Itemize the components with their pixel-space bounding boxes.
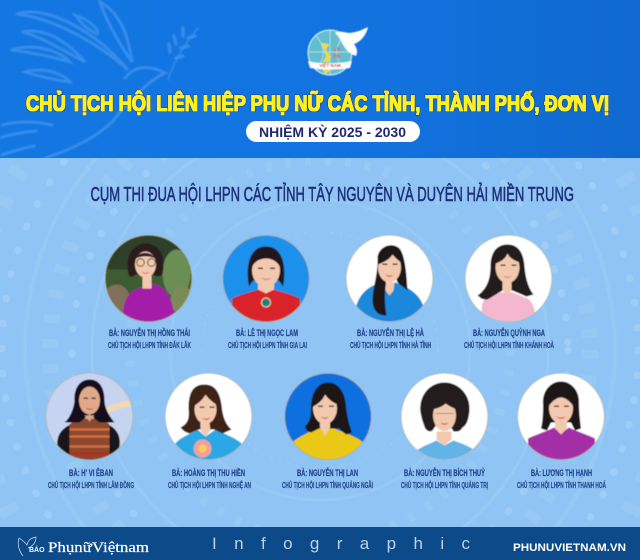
caption: Nguyễn Thị Hồng Thái: CHỦ TỊCH HỘI LHPN TỈNH ĐẮK LẮK bbox=[108, 341, 191, 350]
portrait: Nguyễn Thị Bích Thuỷ bbox=[400, 372, 488, 460]
caption: Nguyễn Quỳnh Nga bbox=[464, 327, 554, 350]
portrait: Nguyễn Thị Lệ Hà bbox=[346, 234, 434, 322]
caption: Lương Thị Hạnh bbox=[517, 468, 606, 490]
portrait: Nguyễn Quỳnh Nga bbox=[464, 234, 552, 322]
caption: Nguyễn Thị Hồng Thái bbox=[108, 327, 191, 350]
icon: women's union logo bbox=[308, 27, 368, 75]
caption: Lê Thị Ngọc Lam bbox=[228, 327, 307, 350]
portrait: Nguyễn Thị Lan bbox=[284, 372, 372, 460]
portrait: Hoàng Thị Thu Hiền bbox=[164, 372, 252, 460]
footer label: Infographic: Infographic bbox=[212, 534, 470, 553]
caption: Nguyễn Thị Bích Thuỷ: BÀ: NGUYỄN THỊ BÍCH THUỶ bbox=[404, 467, 485, 479]
footer logo: Báo Phụ nữ Việt Nam bbox=[18, 537, 149, 556]
icon: women's union logo: VIỆT NAM bbox=[319, 61, 341, 68]
portrait: Nguyễn Thị Hồng Thái bbox=[102, 234, 194, 322]
caption: Nguyễn Thị Lan: BÀ: NGUYỄN THỊ LAN bbox=[297, 467, 358, 479]
decorative drum pattern bbox=[0, 158, 640, 527]
caption: H' Vi Êban bbox=[48, 467, 134, 490]
caption: Hoàng Thị Thu Hiền bbox=[168, 468, 251, 490]
portrait: Lê Thị Ngọc Lam bbox=[222, 234, 310, 322]
caption: Nguyễn Thị Lan bbox=[282, 467, 373, 490]
portrait: Lương Thị Hạnh bbox=[517, 372, 605, 460]
caption: Lương Thị Hạnh: BÀ: LƯƠNG THỊ HẠNH bbox=[531, 468, 592, 479]
caption: Nguyễn Thị Bích Thuỷ: CHỦ TỊCH HỘI LHPN TỈNH QUẢNG TRỊ bbox=[401, 481, 488, 490]
caption: Nguyễn Thị Lệ Hà: CHỦ TỊCH HỘI LHPN TỈNH HÀ TĨNH bbox=[350, 341, 431, 350]
badge: term of office bbox=[246, 121, 420, 142]
caption: Nguyễn Thị Bích Thuỷ bbox=[401, 467, 488, 490]
footer website: PHUNUVIETNAM.VN bbox=[513, 542, 626, 554]
panel: body background bbox=[0, 158, 640, 527]
caption: Nguyễn Thị Lệ Hà: BÀ: NGUYỄN THỊ LỆ HÀ bbox=[357, 327, 424, 339]
caption: Nguyễn Thị Hồng Thái: BÀ: NGUYỄN THỊ HỒNG THÁI bbox=[109, 327, 190, 339]
caption: Lê Thị Ngọc Lam: CHỦ TỊCH HỘI LHPN TỈNH GIA LAI bbox=[228, 341, 307, 350]
caption: H' Vi Êban: CHỦ TỊCH HỘI LHPN TỈNH LÂM ĐỒNG bbox=[48, 480, 134, 490]
footer logo: Báo Phụ nữ Việt Nam: BÁO bbox=[29, 545, 45, 554]
caption: Hoàng Thị Thu Hiền: BÀ: HOÀNG THỊ THU HIỀN bbox=[172, 468, 245, 479]
caption: H' Vi Êban: BÀ: H' VI ÊBAN bbox=[69, 467, 113, 479]
caption: Nguyễn Thị Lan: CHỦ TỊCH HỘI LHPN TỈNH QUẢNG NGÃI bbox=[282, 481, 373, 490]
portrait: H' Vi Êban bbox=[46, 372, 134, 460]
panel: footer bar bbox=[0, 527, 640, 560]
caption: Nguyễn Thị Lệ Hà bbox=[350, 327, 431, 350]
panel: header background bbox=[0, 0, 640, 158]
icon: women's union logo: LH bbox=[334, 47, 341, 53]
icon: women's union logo: PN bbox=[334, 54, 341, 60]
decorative dove watermark bbox=[2, 2, 198, 158]
caption: Lê Thị Ngọc Lam: BÀ: LÊ THỊ NGỌC LAM bbox=[236, 327, 298, 339]
caption: Nguyễn Quỳnh Nga: CHỦ TỊCH HỘI LHPN TỈNH KHÁNH HOÀ bbox=[464, 341, 554, 350]
caption: Nguyễn Quỳnh Nga: BÀ: NGUYỄN QUỲNH NGA bbox=[473, 327, 545, 339]
caption: Hoàng Thị Thu Hiền: CHỦ TỊCH HỘI LHPN TỈNH NGHỆ AN bbox=[168, 481, 251, 490]
badge: term of office: NHIỆM KỲ 2025 - 2030 bbox=[259, 123, 406, 140]
footer logo: Báo Phụ nữ Việt Nam: PhụnữViệtnam bbox=[48, 540, 149, 556]
